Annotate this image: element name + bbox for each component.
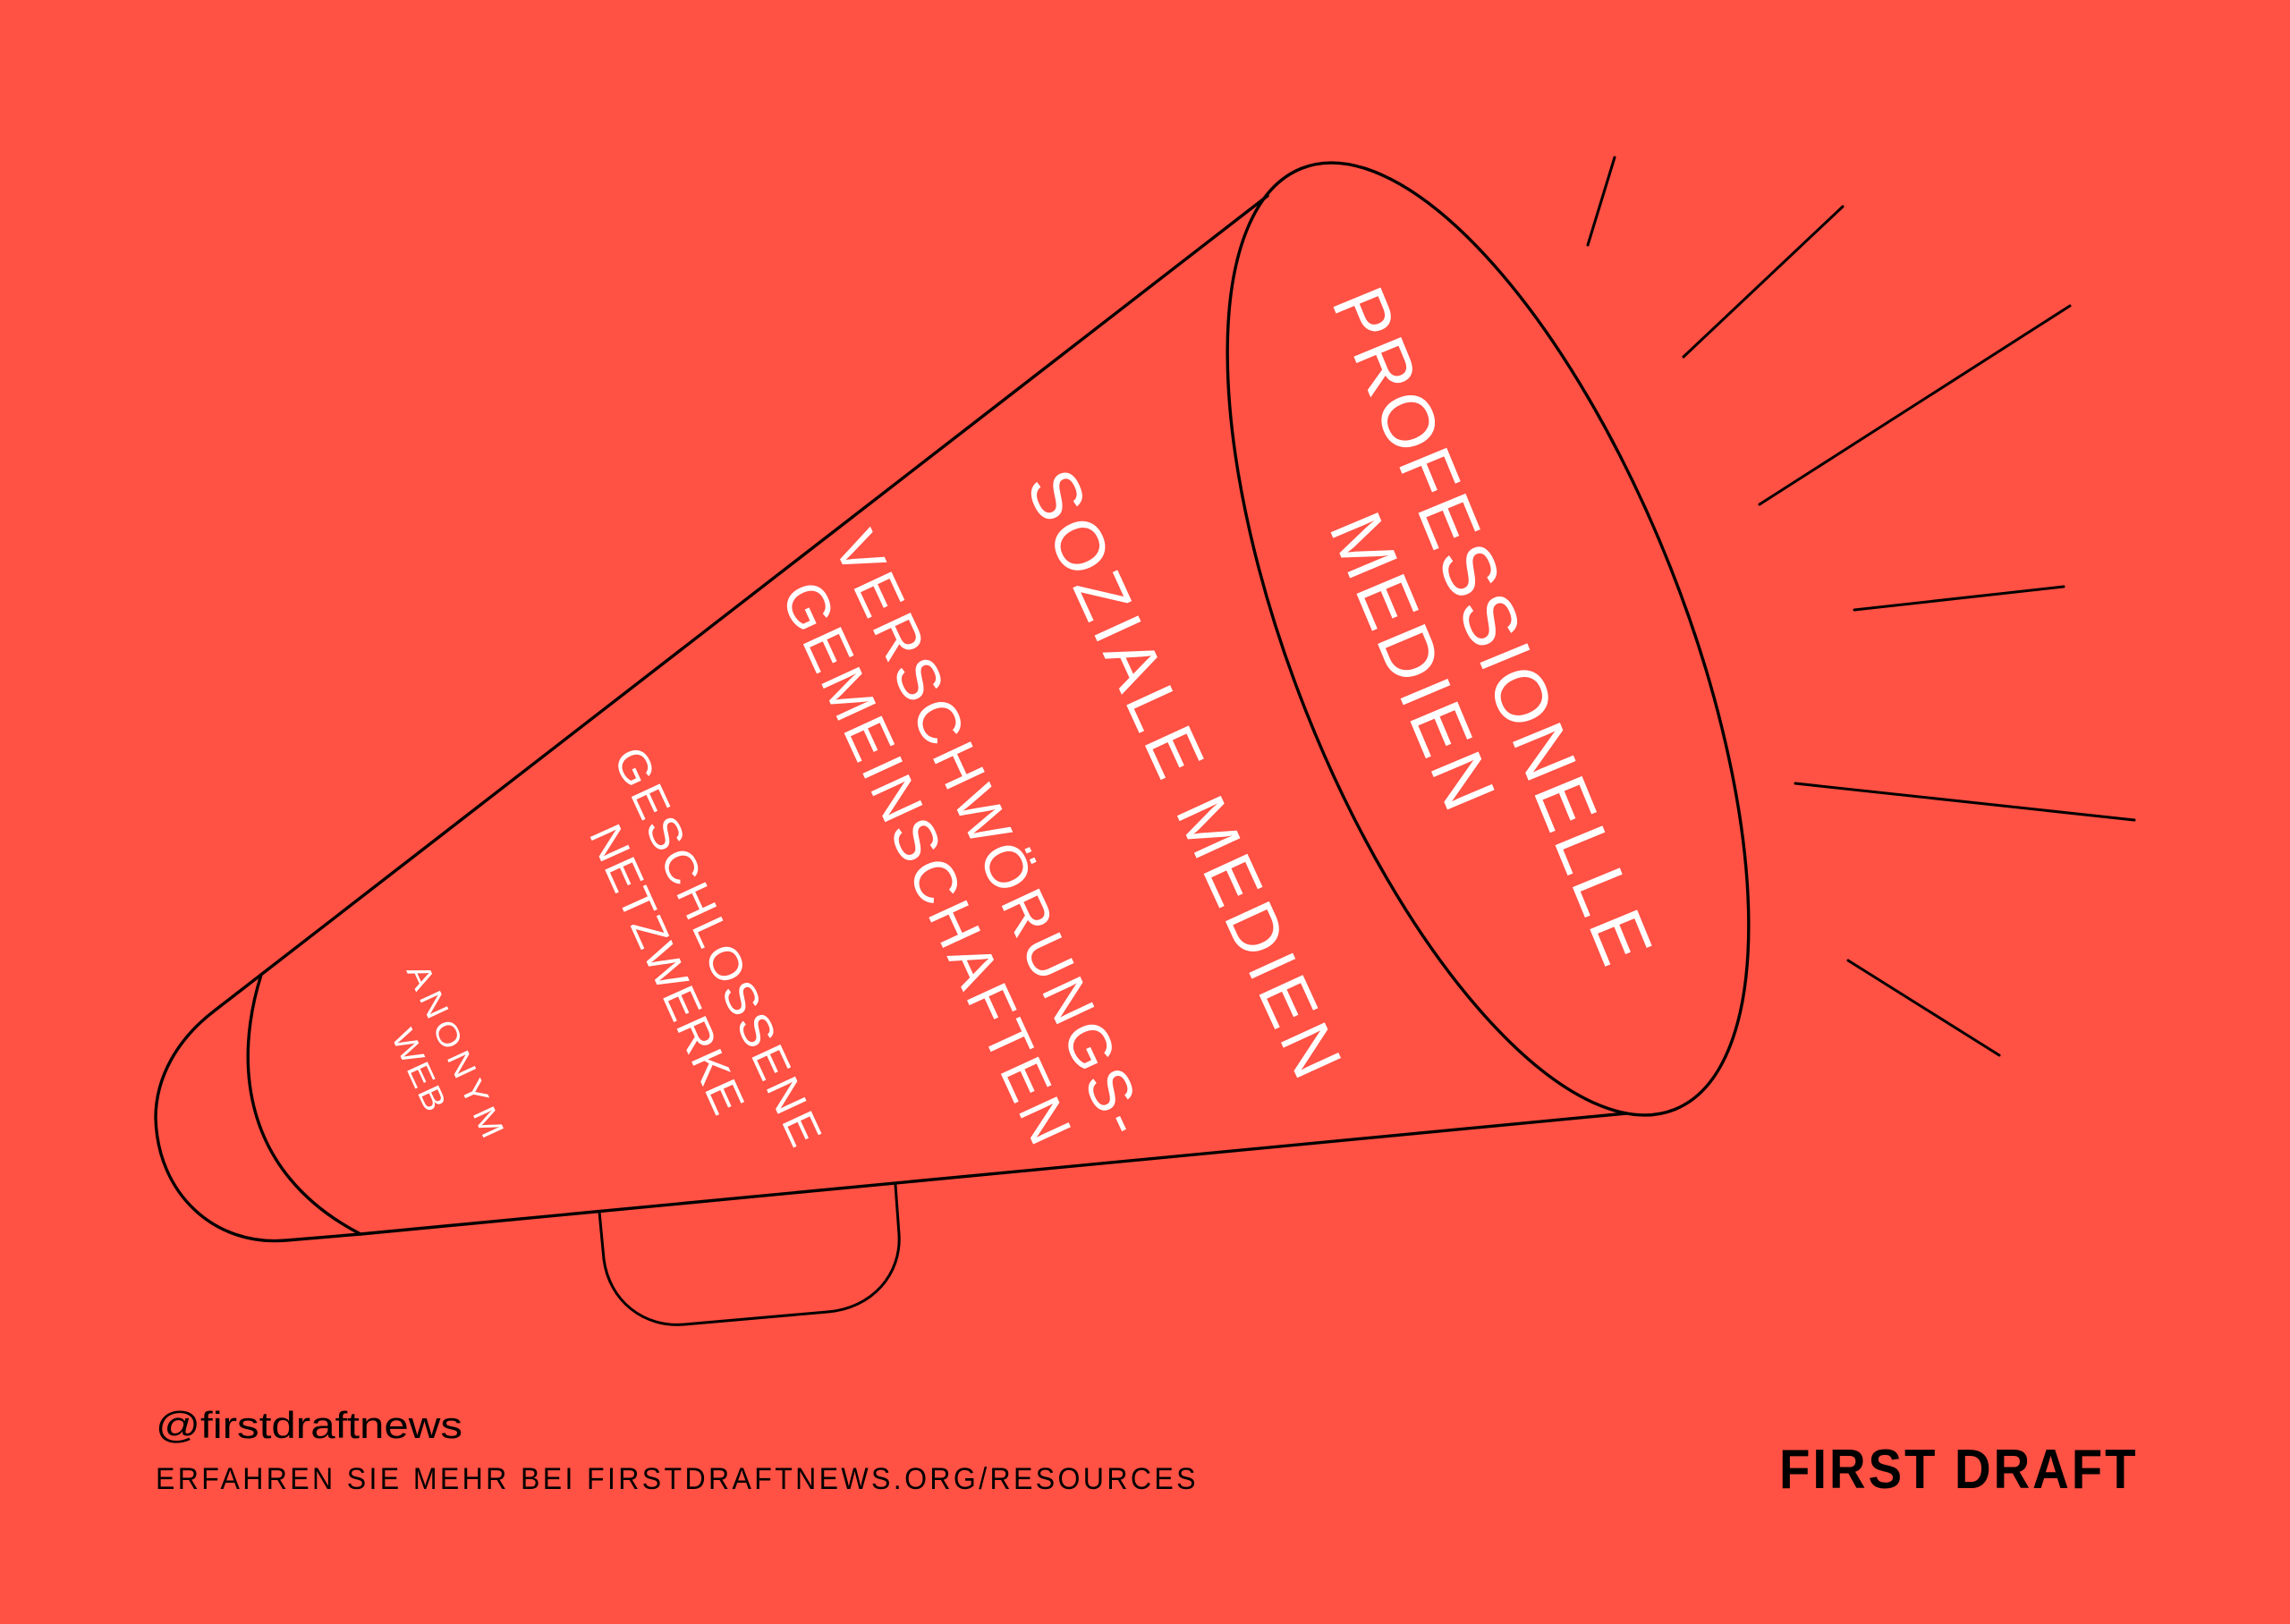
label: Anonym Web: ANONYM	[399, 959, 511, 1144]
logo: First Draft: FIRST DRAFT	[1779, 1438, 2136, 1501]
megaphone mouth ellipse	[1120, 97, 1856, 1181]
label: Professionelle Medien: MEDIEN	[1313, 501, 1512, 822]
label: Verschwörungsgemeinschaften: VERSCHWÖRUNGS-	[820, 521, 1159, 1145]
icon: megaphone outline	[156, 97, 1856, 1324]
megaphone rear cap	[248, 975, 360, 1234]
label: Soziale Medien: SOZIALE MEDIEN	[1012, 457, 1357, 1089]
megaphone handle	[599, 1185, 899, 1324]
footer call to action: ERFAHREN SIE MEHR BEI FIRSTDRAFTNEWS.ORG/RESOURCES	[156, 1462, 1196, 1496]
label: Anonym Web: WEB	[384, 1024, 453, 1117]
label: Geschlossene Netzwerke: NETZWERKE	[579, 817, 753, 1122]
label: Professionelle Medien: PROFESSIONELLE	[1316, 275, 1668, 976]
megaphone cone body	[156, 196, 1626, 1241]
label: Geschlossene Netzwerke: GESCHLOSSENE	[603, 740, 831, 1154]
label: Verschwörungsgemeinschaften: GEMEINSCHAFTEN	[768, 571, 1084, 1155]
sound rays	[1588, 157, 2134, 1055]
social handle: @firstdraftnews	[156, 1404, 462, 1446]
